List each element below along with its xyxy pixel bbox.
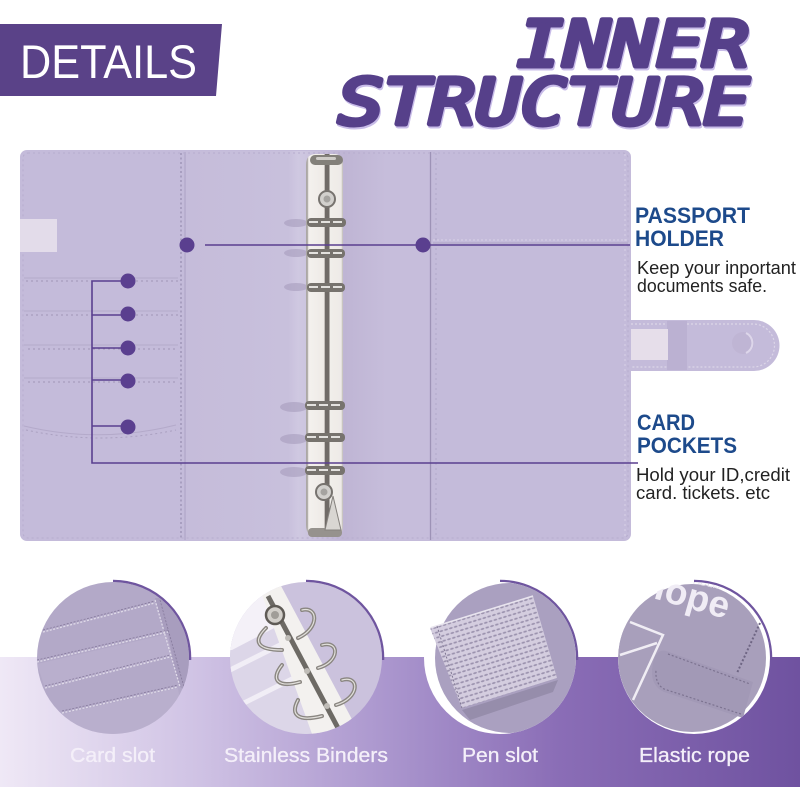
title: STRUCTURE [339, 68, 750, 141]
cover strap with snap [628, 320, 780, 371]
callout: passport holder: PASSPORT [635, 203, 751, 228]
open binder photo [20, 150, 780, 541]
title: INNER [518, 10, 750, 83]
feature labels: Pen slot [462, 745, 538, 767]
details banner [0, 24, 222, 96]
feature labels: Card slot [70, 745, 155, 767]
detail: elastic rope [618, 562, 771, 734]
details banner: DETAILS [20, 35, 197, 88]
feature band [0, 657, 800, 787]
title [338, 8, 750, 141]
callout: passport holder: HOLDER [635, 226, 724, 251]
pen loop [20, 219, 57, 252]
detail: stainless binders [230, 580, 384, 734]
callout: passport holder [635, 203, 796, 296]
feature labels: Elastic rope [639, 745, 750, 767]
detail: elastic rope: ADLIJ [693, 576, 721, 592]
card pocket seams [24, 278, 178, 438]
edge stitching [23, 153, 628, 538]
passport pocket seam [433, 239, 628, 241]
callout: passport holder: documents safe. [637, 276, 767, 296]
title: INNER [517, 8, 749, 81]
detail: card slot [37, 580, 192, 734]
binder body [20, 150, 631, 541]
callout: card pockets: Hold your ID,credit [636, 465, 790, 485]
feature labels [70, 745, 750, 767]
detail: elastic rope: Hope [635, 562, 735, 627]
feature labels: Stainless Binders [224, 745, 388, 767]
callout: card pockets: POCKETS [637, 433, 737, 458]
detail: pen slot [424, 581, 585, 734]
callout: card pockets: card. tickets. etc [636, 483, 770, 503]
ring shadows [280, 219, 308, 477]
spine panel [186, 151, 430, 540]
callout: card pockets [636, 410, 790, 503]
title: STRUCTURE [338, 66, 749, 139]
binder mechanism [280, 154, 346, 537]
rings [305, 218, 346, 475]
callout lines and dots [92, 238, 638, 463]
callout: passport holder: Keep your inportant [637, 258, 796, 278]
card pockets leader [92, 274, 638, 463]
callout: card pockets: CARD [637, 410, 695, 435]
passport holder leader [180, 238, 630, 252]
